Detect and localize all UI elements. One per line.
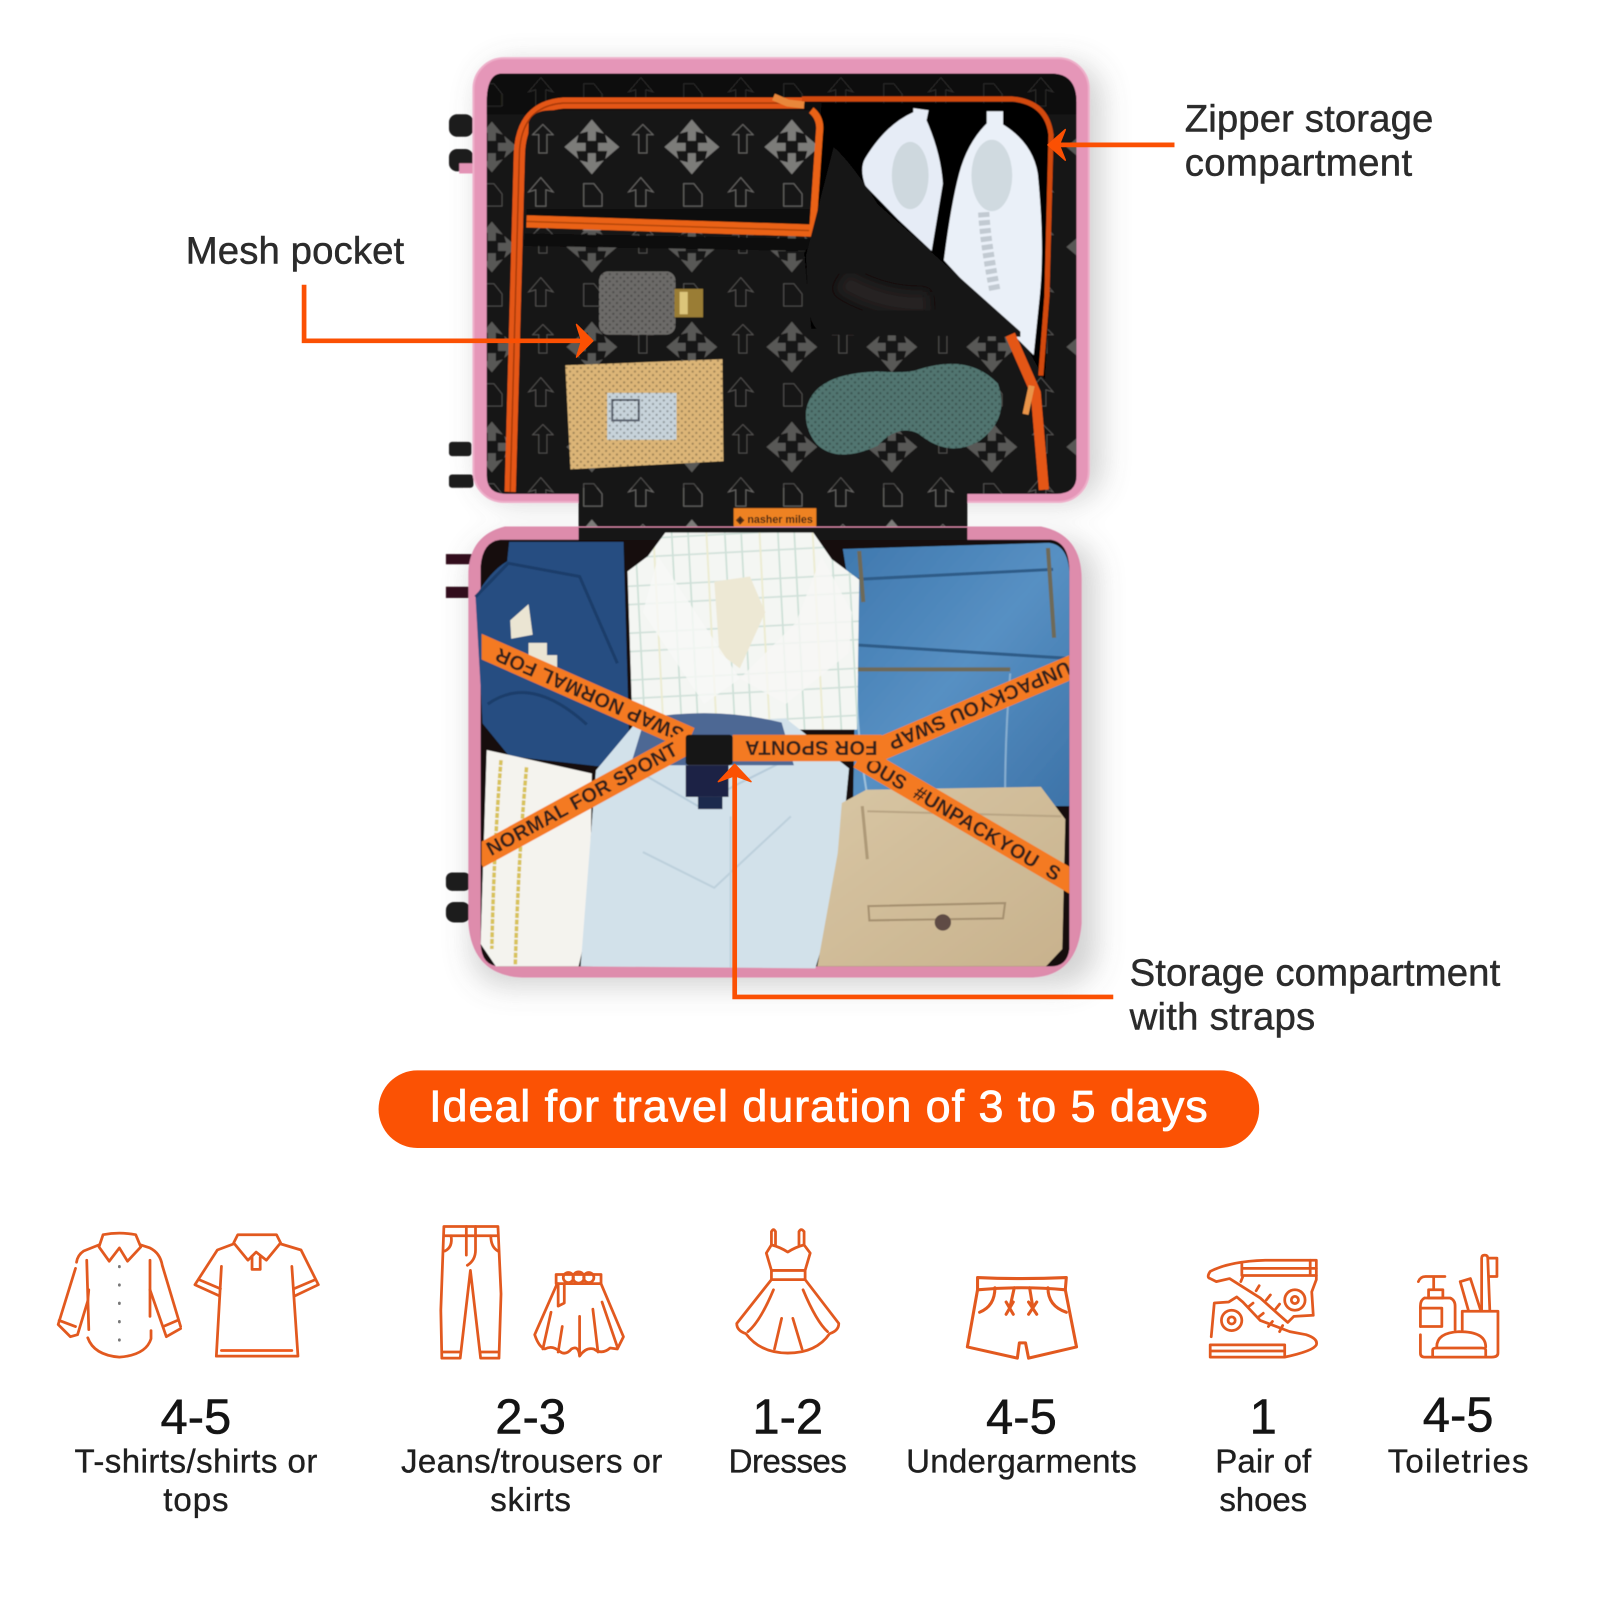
icon: sneakers xyxy=(1208,1260,1317,1357)
icon: dress xyxy=(737,1230,839,1353)
brand label: ◈ nasher miles xyxy=(735,514,813,526)
caption: skirts xyxy=(490,1482,571,1519)
hinge flap xyxy=(579,488,967,541)
item: dresses xyxy=(729,1230,847,1480)
top lid shell xyxy=(473,58,1089,502)
plaid shirt xyxy=(628,533,859,730)
top lid lining xyxy=(487,73,1077,494)
caption: T-shirts/shirts or xyxy=(74,1443,317,1480)
icon: shorts xyxy=(967,1278,1077,1358)
item: shoes xyxy=(1208,1260,1317,1519)
arrow: zipper storage compartment xyxy=(1048,130,1174,160)
count: 1-2 xyxy=(752,1391,823,1445)
label: storage compartment with straps: Storage compartment xyxy=(1130,952,1501,995)
shoe compartment xyxy=(773,97,1051,490)
label: storage compartment with straps xyxy=(1129,952,1501,1039)
orange straps with printed text xyxy=(480,633,1070,894)
zipper right edge xyxy=(802,99,1051,376)
buckle xyxy=(686,735,733,809)
navy polo xyxy=(476,542,630,768)
bottom shell xyxy=(469,528,1081,977)
arrow: storage compartment with straps xyxy=(718,764,1113,997)
lower right zipper xyxy=(1010,335,1044,490)
label: storage compartment with straps: with straps xyxy=(1129,996,1315,1039)
item: undergarments xyxy=(906,1278,1137,1480)
item: toiletries xyxy=(1388,1255,1529,1480)
eye mask in mesh xyxy=(806,364,1001,455)
caption: shoes xyxy=(1219,1482,1307,1519)
icon: toiletries xyxy=(1418,1255,1498,1357)
caption: Dresses xyxy=(729,1443,847,1480)
count: 4-5 xyxy=(161,1391,231,1445)
wipes pouch in mesh xyxy=(565,359,723,469)
caption: tops xyxy=(163,1482,229,1519)
strap: unpackyou lower: OUS #UNPACKYOU S xyxy=(866,760,1061,880)
caption: Pair of xyxy=(1215,1443,1312,1480)
banner: travel duration xyxy=(379,1070,1259,1148)
banner: travel duration: Ideal for travel duration of 3 to 5 days xyxy=(429,1080,1208,1131)
count: 2-3 xyxy=(495,1391,566,1445)
count: 4-5 xyxy=(986,1391,1057,1445)
strap: normal for spontaneous: NORMAL FOR SPONT xyxy=(485,741,676,856)
hinge flap overlap xyxy=(579,528,967,543)
count: 4-5 xyxy=(1423,1389,1494,1443)
upper pocket xyxy=(524,110,819,245)
soft shadow xyxy=(471,63,1102,986)
label: mesh pocket: Mesh pocket xyxy=(186,229,405,272)
jeans xyxy=(843,543,1069,806)
item: jeans and skirts xyxy=(401,1227,662,1519)
wheels xyxy=(446,114,476,922)
khaki trousers xyxy=(817,787,1065,966)
icon: left shoe xyxy=(862,108,943,251)
caption xyxy=(1215,1443,1312,1519)
strap: swap unpackyou: #UNPACKYOU SWAP xyxy=(890,662,1070,750)
caption xyxy=(74,1443,317,1519)
brand label xyxy=(734,508,816,529)
icon: polo t-shirt xyxy=(195,1235,318,1356)
perfume in mesh xyxy=(599,271,703,335)
icon: shirt xyxy=(58,1233,181,1357)
icon: right shoe xyxy=(944,111,1042,355)
black mesh flap xyxy=(806,147,1020,337)
item: shirts and t-shirts xyxy=(58,1233,318,1519)
pocket right zipper xyxy=(811,110,820,237)
strap: for spontaneous centre: FOR SPONTA xyxy=(745,740,877,756)
count: 1 xyxy=(1250,1391,1277,1445)
caption: Toiletries xyxy=(1388,1443,1529,1480)
label: zipper storage compartment: Zipper storage xyxy=(1185,98,1433,141)
zipper pull top xyxy=(773,97,804,105)
main zipper left and top xyxy=(510,103,804,492)
caption: Jeans/trousers or xyxy=(401,1443,662,1480)
caption: Undergarments xyxy=(906,1443,1137,1480)
suitcase xyxy=(445,51,1115,998)
icon: trousers xyxy=(441,1227,501,1358)
white towel xyxy=(481,750,592,966)
bottom interior xyxy=(481,540,1069,966)
caption xyxy=(401,1443,662,1519)
label: zipper storage compartment: compartment xyxy=(1185,142,1412,185)
label: zipper storage compartment xyxy=(1185,98,1433,185)
icon: skirt xyxy=(535,1272,623,1356)
arrow: mesh pocket xyxy=(304,285,593,357)
light blue shirt xyxy=(581,713,849,968)
strap: swap normal for: SWAP NORMAL FOR xyxy=(496,647,684,738)
